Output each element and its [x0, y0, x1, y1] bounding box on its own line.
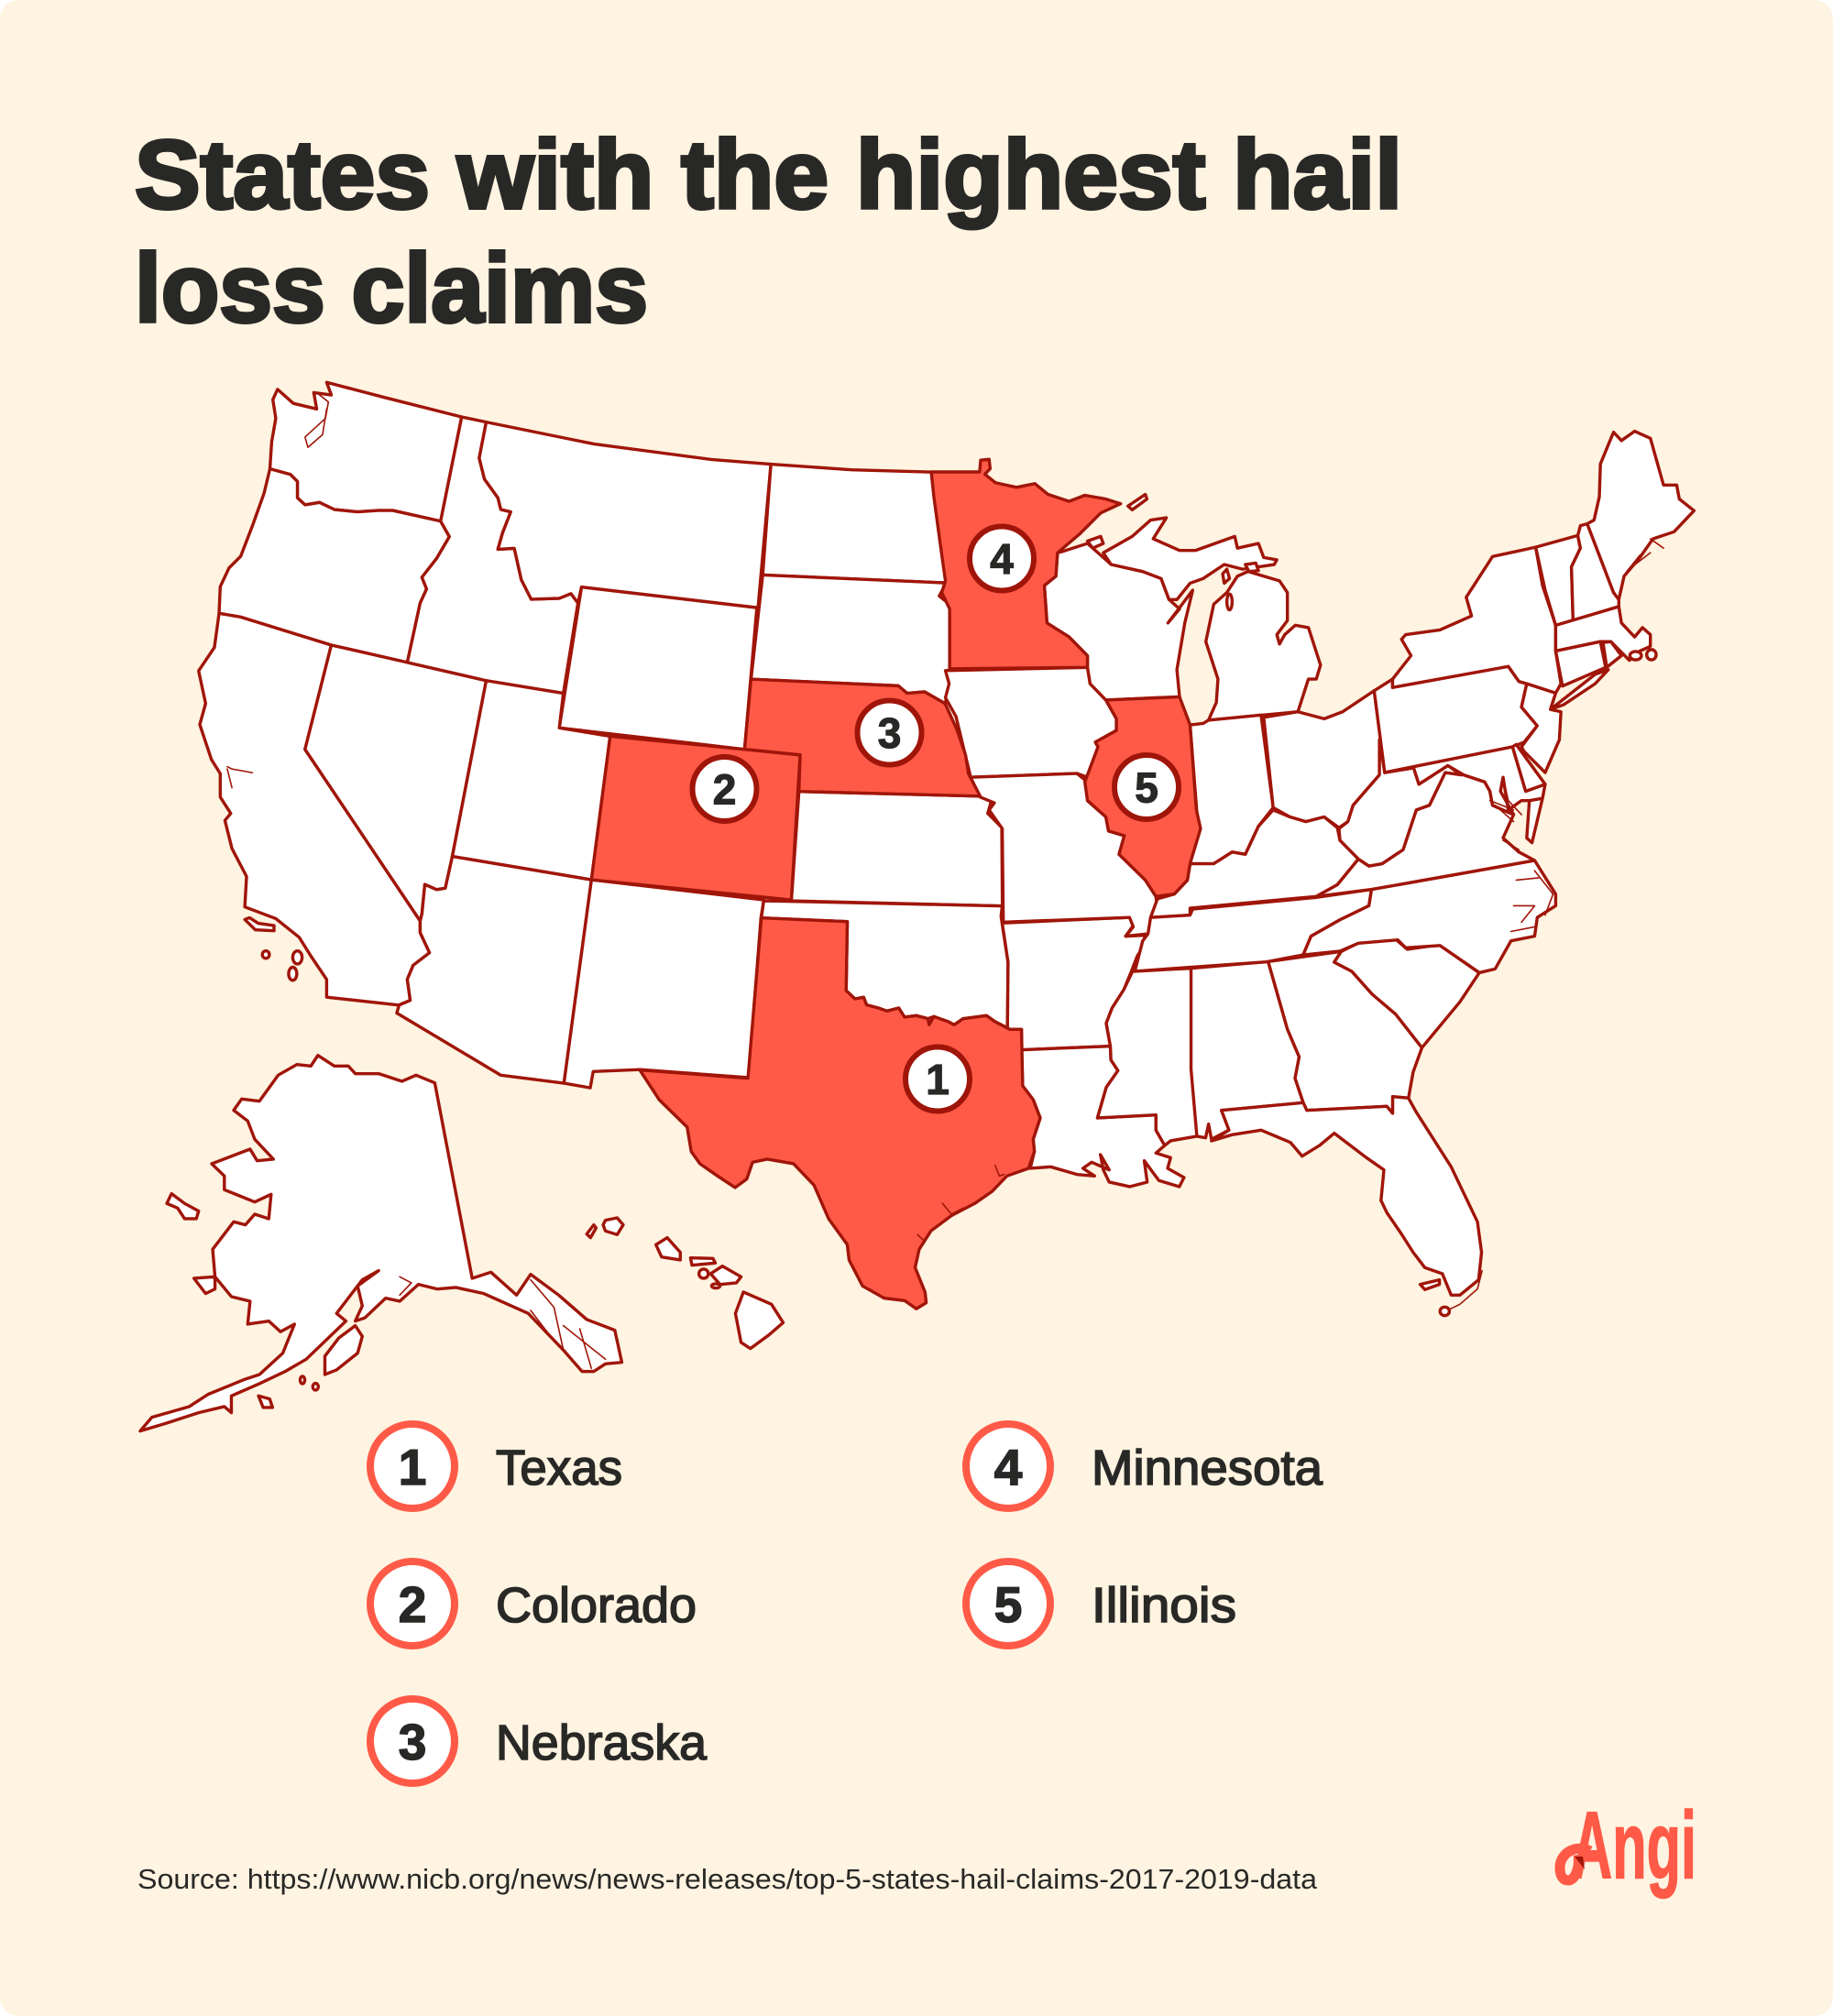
- state: Georgia: [1268, 951, 1421, 1113]
- state: Ohio: [1264, 691, 1380, 827]
- state: Connecticut: [1555, 641, 1606, 686]
- state: South Carolina: [1334, 939, 1479, 1047]
- state: California: [199, 613, 430, 1005]
- state: Michigan lower peninsula: [1206, 572, 1321, 720]
- legend item: Illinois: Illinois: [1092, 1578, 1236, 1633]
- legend: [370, 1424, 1323, 1783]
- island: Isle Royale: [1128, 494, 1147, 509]
- state: Oregon: [219, 469, 449, 663]
- title: [135, 121, 1402, 343]
- state: Maine: [1587, 432, 1694, 599]
- legend item: Texas: Texas: [496, 1441, 622, 1496]
- map marker 5: 5: [1135, 764, 1158, 812]
- coast detail: Alaska Peninsula islands: [258, 1396, 272, 1408]
- state: West Virginia: [1339, 740, 1461, 866]
- state: South Dakota: [751, 575, 949, 704]
- western states: [199, 382, 1003, 1088]
- state: Massachusetts: [1555, 607, 1651, 661]
- state: Nebraska: [744, 679, 980, 796]
- state: Pennsylvania: [1374, 666, 1537, 772]
- map marker 1: [906, 1046, 970, 1111]
- island: San Nicolas: [262, 951, 269, 959]
- legend item: Colorado: Colorado: [496, 1578, 697, 1633]
- state: Alaska: [140, 1056, 621, 1431]
- map marker 3: 3: [878, 709, 901, 757]
- island: Nunivak: [194, 1276, 215, 1294]
- island: Santa Catalina: [292, 951, 302, 964]
- state: Louisiana: [1022, 1046, 1184, 1187]
- islands: California Channel Islands: [245, 917, 274, 931]
- coast detail: Puget Sound: [305, 392, 328, 447]
- island: Florida Bay: [1421, 1280, 1440, 1289]
- island: Oahu: [656, 1238, 680, 1260]
- island: Dry Tortugas: [1440, 1307, 1449, 1316]
- coast detail: Galveston Bay: [917, 1166, 1004, 1242]
- state: New York: [1392, 547, 1561, 693]
- island: Niihau: [587, 1225, 596, 1238]
- island: Molokai: [690, 1258, 716, 1265]
- state: Illinois: [1085, 696, 1201, 896]
- state: Texas: [640, 918, 1040, 1309]
- legend item: Colorado: 2: [399, 1576, 426, 1633]
- map marker 5: [1114, 755, 1179, 819]
- US map: [140, 382, 1694, 1431]
- source line: Source: https://www.nicb.org/news/news-releases/top-5-states-hail-claims-2017-2019-data: [137, 1863, 1318, 1895]
- state: Iowa: [946, 667, 1116, 777]
- map marker 2: [693, 757, 757, 821]
- state: Minnesota: [931, 459, 1121, 669]
- legend item: Texas: [370, 1424, 622, 1508]
- logo: Angi: [1560, 1792, 1696, 1899]
- other highlighted states: [591, 679, 980, 900]
- legend item: Nebraska: [370, 1699, 708, 1783]
- state: Arizona: [397, 857, 591, 1083]
- state: Montana: [479, 422, 771, 608]
- map marker 2: 2: [713, 766, 736, 814]
- state: North Carolina: [1303, 860, 1555, 972]
- state: Vermont: [1536, 535, 1580, 625]
- legend item: Colorado: [370, 1561, 697, 1646]
- island: Martha's Vineyard: [1630, 652, 1641, 660]
- island: Kahoolawe: [711, 1284, 720, 1288]
- legend item: Illinois: [966, 1561, 1236, 1646]
- map marker 1: 1: [926, 1056, 949, 1103]
- title: loss claims: [135, 235, 648, 343]
- state: Arkansas: [1003, 917, 1146, 1050]
- island: Beaver group: [1227, 594, 1232, 610]
- legend item: Minnesota: Minnesota: [1092, 1441, 1323, 1496]
- state: Colorado: [591, 736, 800, 900]
- state: Tennessee: [1135, 890, 1372, 971]
- legend item: Nebraska: Nebraska: [496, 1715, 708, 1770]
- island: Apostle Islands: [1088, 536, 1103, 548]
- state: Florida: [1212, 1097, 1482, 1295]
- legend item: Texas: 1: [399, 1439, 426, 1496]
- south central and southeast states: [762, 901, 1482, 1316]
- state: Nevada: [305, 645, 487, 921]
- state: Oklahoma: [762, 901, 1008, 1028]
- state: Kentucky: [1150, 810, 1358, 917]
- legend item: Minnesota: 4: [994, 1439, 1023, 1496]
- state: Michigan upper peninsula: [1103, 518, 1277, 599]
- coast detail: Lake Michigan islands: [1223, 569, 1230, 583]
- island: Maui: [710, 1266, 741, 1285]
- midwest and eastern states: [946, 432, 1694, 972]
- island: St. Lawrence: [167, 1194, 199, 1219]
- map marker 3: [858, 700, 922, 764]
- coast detail: Maine bays: [1627, 539, 1663, 572]
- state: New Hampshire: [1572, 524, 1619, 620]
- island: Kauai: [603, 1218, 623, 1234]
- map marker 4: [970, 526, 1034, 590]
- state: Wisconsin: [1044, 543, 1192, 700]
- state: New Jersey: [1521, 684, 1561, 772]
- legend item: Minnesota: [966, 1424, 1323, 1508]
- state: Missouri: [971, 773, 1158, 937]
- state: Kansas: [791, 792, 1003, 906]
- state: Long Island: [1551, 670, 1608, 709]
- state: Virginia eastern shore: [1527, 798, 1542, 843]
- map marker 4: 4: [990, 535, 1014, 583]
- state: North Dakota: [763, 465, 946, 583]
- state: Utah: [453, 681, 610, 880]
- Texas highlighted state: [640, 918, 1040, 1309]
- island: Chirikof: [313, 1384, 318, 1390]
- island: Trinity: [300, 1376, 305, 1384]
- island: Hawaii: [735, 1292, 783, 1349]
- state: Delaware: [1512, 744, 1545, 791]
- logo: Angi: Angi: [1572, 1792, 1696, 1899]
- island: Nantucket: [1647, 650, 1656, 660]
- islands: Florida Keys: [1442, 1271, 1482, 1313]
- legend item: Illinois: 5: [994, 1576, 1022, 1633]
- state: Indiana: [1190, 715, 1273, 864]
- title: States with the highest hail: [135, 121, 1402, 229]
- island: Lanai: [699, 1269, 708, 1278]
- coast detail: Alaska panhandle channels: [400, 1276, 606, 1368]
- legend item: Nebraska: 3: [399, 1714, 426, 1770]
- island: San Clemente: [289, 968, 297, 981]
- Alaska and Hawaii: [140, 1056, 783, 1431]
- state: Washington: [270, 382, 462, 521]
- coast detail: Chesapeake Bay and Virginia rivers: [1490, 777, 1521, 849]
- coast detail: San Francisco Bay: [227, 767, 252, 788]
- island: Mackinac: [1246, 563, 1258, 572]
- island: Kodiak: [324, 1326, 362, 1375]
- state: Mississippi: [1097, 969, 1197, 1145]
- state: Rhode Island: [1603, 641, 1621, 667]
- state: New Mexico: [564, 880, 763, 1088]
- state: Idaho: [407, 417, 578, 694]
- state: Alabama: [1191, 961, 1303, 1139]
- coast detail: North Carolina sounds: [1511, 871, 1553, 932]
- state: Virginia: [1316, 772, 1534, 896]
- state: Wyoming: [559, 587, 757, 750]
- state: Maryland: [1385, 747, 1545, 815]
